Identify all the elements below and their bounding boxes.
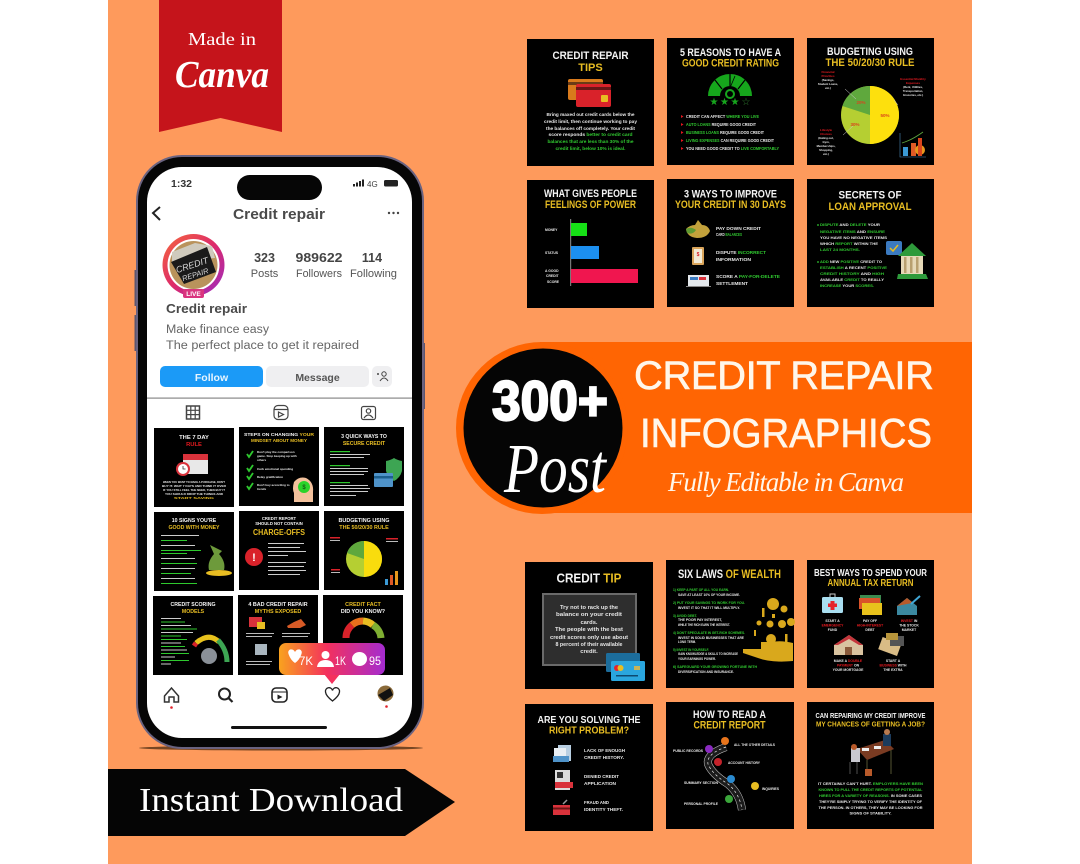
pie chart [841,86,899,144]
post: 7 day rule: THE 7 DAY [179,435,209,441]
card: six laws of wealth: LONG TERM. [678,640,696,644]
profile stats [251,251,397,280]
card: getting a job: HIRES FOR A VARIETY OF REASONS. IN SOME CASES [819,793,922,798]
card: six laws of wealth: INVEST IN SOLID BUSINESSES THAT ARE [678,636,744,640]
post: mindset steps: $ [302,485,306,491]
pie chart: 30% [850,122,860,127]
card: six laws of wealth: 6) SAFEGUARD YOUR GROWING FORTUNE WITH [673,665,758,669]
card: 5 reasons: BUSINESS LOANS REQUIRE GOOD CREDIT [686,130,764,135]
phone mockup [134,155,425,750]
headline: INFOGRAPHICS [640,410,932,456]
headline: CREDIT REPAIR [634,354,934,398]
card: right problem: IDENTITY THEFT. [584,807,623,812]
card: budgeting 50/20/30: etc.) [823,152,829,156]
status bar: 1:32 [171,178,192,190]
icon: investment [897,596,920,615]
post: myths exposed: 4 BAD CREDIT REPAIR [248,602,308,608]
card: budgeting 50/20/30: Shopping, [819,148,833,152]
card: budgeting 50/20/30: THE 50/20/30 RULE [826,57,914,69]
card: 5 reasons: LIVING EXPENSES CAN REQUIRE GOOD CREDIT [686,138,774,143]
card: right problem: FRAUD AND [584,800,610,805]
post: credit fact: DID YOU KNOW? [341,609,385,615]
post: secure credit [324,427,404,506]
300+ post badge: 300+ [492,369,608,432]
profile header [153,207,399,223]
post: mindset steps: others [257,458,266,462]
card: credit repair tips: CREDIT REPAIR [552,50,629,62]
post: mindset steps: Delay gratification [257,475,283,479]
card: loan approval: SECRETS OF [838,190,902,202]
card: budgeting 50/20/30: Essential Monthly [900,77,926,81]
icon: gold coins [743,598,795,662]
card: credit tip: Try not to rack up the [560,605,619,611]
card: read a credit report: HOW TO READ A [693,709,766,721]
card: credit tip: cards. [580,620,598,626]
card: annual tax return: EMERGENCY [822,624,844,628]
card: 3 ways to improve: $ [697,252,700,258]
bar chart: CREDIT [546,274,560,278]
card: loan approval: INCREASE YOUR SCORES. [820,283,874,288]
post: charge-offs: CREDIT REPORT [262,516,297,521]
card: loan approval: ADD NEW POSITIVE CREDIT TO [820,259,882,264]
card: six laws of wealth: WHILE THE RICH EARN THE INTEREST. [678,623,730,627]
post: 7 day rule: START SAVING [174,496,214,500]
card: annual tax return: START A [825,619,840,623]
card: 3 ways to improve: 3 WAYS TO IMPROVE [684,188,777,200]
post: 7 day rule: RULE [186,442,202,448]
profile stats: 114 [362,251,382,265]
card: annual tax return: PAY OFF [863,619,877,623]
card: 5 reasons: ☆ [742,97,751,108]
card: loan approval: LOAN APPROVAL [828,201,912,213]
card: budgeting 50/20/30: Financial [821,70,835,74]
card: annual tax return: INVEST IN [901,619,918,623]
headline [634,354,934,497]
card: budgeting 50/20/30: Groceries, etc.) [903,93,923,97]
post: 7 day rule: IF YOU STILL FEEL THE NEED, THEN BUY IT [163,488,225,492]
card: read a credit report: ALL THE OTHER DETAILS [734,743,775,747]
engagement popup: 7K [299,656,313,668]
bar chart: MONEY [545,228,558,232]
card: budgeting 50/20/30: (Savings, [822,78,834,82]
post: mindset steps: Don't play the comparison [257,450,295,454]
avatar [162,234,224,298]
avatar: REPAIR [181,266,210,283]
engagement popup: 95 [369,656,381,668]
card: loan approval: DISPUTE AND DELETE YOUR [820,222,880,227]
card: annual tax return: PAYMENT ON [837,664,860,668]
post: charge-offs: CHARGE-OFFS [253,528,306,537]
card: budgeting 50/20/30 [807,38,934,165]
card: six laws of wealth: DIVERSIFICATION AND INSURANCE. [678,670,734,674]
card: credit repair tips: credit limit, below 10% is ideal. [556,146,626,151]
card: six laws of wealth: THE POOR PAY INTEREST, [678,618,722,622]
card: feelings of power: FEELINGS OF POWER [545,199,636,211]
card: annual tax return: BEST WAYS TO SPEND YOUR [814,568,928,579]
bar chart: STATUS [545,251,559,255]
profile stats: 323 [254,251,275,265]
card: budgeting 50/20/30: Choices [820,132,832,136]
card: feelings of power [527,180,654,308]
profile stats: 989622 [296,251,343,265]
post: secure credit: 3 QUICK WAYS TO [341,434,387,440]
post: mindset steps: MINDSET ABOUT MONEY [251,438,308,444]
card: six laws of wealth: 3) AVOID DEBT. [673,614,697,618]
card: read a credit report: PERSONAL PROFILE [684,802,718,806]
card: read a credit report: SUMMARY SECTION [684,781,719,785]
card: six laws of wealth [666,560,795,688]
headline: Fully Editable in Canva [667,467,904,497]
icon: business [878,633,904,656]
post: myths exposed [238,595,318,675]
post: good with money: 10 SIGNS YOU'RE [172,518,217,524]
card: right problem: DENIED CREDIT [584,774,619,779]
card: six laws of wealth: SAVE AT LEAST 10% OF YOUR INCOME. [678,593,740,597]
card: read a credit report [666,702,794,829]
ribbon: Made in Canva [159,0,282,132]
avatar: LIVE [186,291,201,298]
card: feelings of power: WHAT GIVES PEOPLE [544,188,637,200]
follow buttons: Message [295,372,340,384]
post: credit fact: CREDIT FACT [345,602,382,608]
phone post grid [153,427,404,675]
panel: orange background [108,0,972,864]
card: right problem: RIGHT PROBLEM? [549,724,629,736]
card: right problem: CREDIT HISTORY. [584,755,624,760]
post: mindset steps [239,427,319,506]
card: budgeting 50/20/30: Gym, [822,140,830,144]
card: right problem [525,704,653,831]
card: annual tax return: MARKET [902,628,917,632]
card: budgeting 50/20/30: etc.) [825,86,831,90]
card: getting a job [807,702,934,829]
card: annual tax return: ANNUAL TAX RETURN [828,578,914,589]
engagement popup [279,643,385,684]
card: 5 reasons: ★ [720,97,729,108]
card: annual tax return: THE EXTRA [883,668,903,672]
banner: credit repair title [456,342,972,514]
follow buttons: Follow [195,372,229,384]
post: 7 day rule: WHEN YOU WANT TO MAKE A PURCHASE, DON'T [163,480,225,484]
card: credit tip: credit scores only use about [550,635,628,641]
card: 5 reasons: GOOD CREDIT RATING [682,58,779,70]
profile header: Credit repair [233,207,325,223]
post: charge-offs [239,511,319,590]
card: credit repair tips [527,39,654,166]
card: 5 reasons: YOU NEED GOOD CREDIT TO LIVE COMFORTABLY [686,146,779,151]
tab icons [186,406,376,420]
profile bio: The perfect place to get it repaired [166,340,359,352]
card: annual tax return: FUND [828,628,838,632]
card: credit tip: CREDIT TIP [556,570,622,586]
card: 3 ways to improve: DISPUTE INCORRECT [716,250,766,256]
card: getting a job: THE PERSON. IN OTHERS, THEY MAY BE LOOKING FOR [818,805,923,810]
icon: credit cards [859,595,882,615]
status bar [171,175,398,200]
profile stats: Followers [296,268,342,280]
bottom card set [525,560,934,831]
card: budgeting 50/20/30: (Eating out, [818,136,834,140]
card: 3 ways to improve: PAY DOWN CREDIT [716,226,761,232]
card: annual tax return: THE STOCK [899,624,919,628]
card: 5 reasons [667,38,794,165]
card: 5 reasons: CREDIT CAN AFFECT WHERE YOU LIVE [686,114,759,119]
post: good with money: GOOD WITH MONEY [168,525,220,531]
avatar: CREDIT [175,255,211,275]
card: six laws of wealth: INVEST IT SO THAT IT WILL MULTIPLY. [678,606,740,610]
icon: house [834,635,863,655]
card: six laws of wealth: SIX LAWS OF WEALTH [678,569,781,581]
bar chart: A GOOD [545,269,559,273]
post: scoring models: MODELS [182,609,205,615]
banner: Instant Download [108,769,455,836]
card: read a credit report: PUBLIC RECORDS [673,749,703,753]
banner: Instant Download: Instant Download [139,782,403,819]
profile stats: Following [350,268,397,280]
engagement popup: 1K [335,656,346,668]
post: mindset steps: Don't buy according to [257,483,290,487]
card: credit tip: credit. [580,649,598,655]
profile bio [166,301,359,352]
card: credit repair tips: score responds better to credit card [548,132,633,137]
card: 3 ways to improve: SETTLEMENT [716,281,748,287]
post: mindset steps: trends [257,487,266,491]
ribbon: Made in Canva: Made in [188,29,256,49]
card: six laws of wealth: YOUR EARNINGS POWER. [678,657,716,661]
card: annual tax return: HIGH-INTEREST [857,624,884,628]
post: secure credit: SECURE CREDIT [343,441,386,447]
bar chart [545,219,638,286]
card: annual tax return [807,560,934,688]
card: six laws of wealth: GAIN KNOWLEDGE & SKILLS TO INCREASE [678,652,738,656]
card: loan approval: NEGATIVE ITEMS AND ENSURE [820,229,885,234]
card: getting a job: KNOWN TO PULL THE CREDIT REPORTS OF POTENTIAL [818,787,923,792]
card: annual tax return: DEBT [865,628,876,632]
card: six laws of wealth: 5) INVEST IN YOURSELF. [673,648,709,652]
card: credit repair tips: balances that are less than 30% of the [548,139,634,144]
phone screen [147,167,412,738]
card: credit repair tips: Bring maxed out credit cards below the [546,112,635,117]
illustration: interview desk [850,729,894,776]
ribbon: Made in Canva: Canva [175,54,269,96]
card: loan approval: CREDIT HISTORY AND HIGH [820,271,884,276]
status bar: 4G [367,180,378,189]
post: budgeting mini: BUDGETING USING [339,518,389,524]
card: annual tax return: BUSINESS WITH [880,664,907,668]
card: credit repair tips: credit limit, then continue working to pay [544,119,637,124]
post: 7 day rule [154,428,234,507]
card: budgeting 50/20/30: Student Loans, [818,82,838,86]
card: budgeting 50/20/30: (Rent, Utilities, [903,85,923,89]
bottom navigation [164,686,394,729]
card: loan approval: ESTABLISH A RECENT POSITIVE [820,265,887,270]
card: loan approval: YOU HAVE NO NEGATIVE ITEMS [820,235,887,240]
card: read a credit report: CREDIT REPORT [694,720,766,732]
post: charge-offs: SHOULD NOT CONTAIN [255,521,303,526]
card: annual tax return: MAKE A DOUBLE [834,659,863,663]
post: mindset steps: game. Stop keeping up with [257,454,297,458]
card: read a credit report: ACCOUNT HISTORY [728,761,761,765]
post: credit fact [323,595,403,675]
pie chart: 20% [856,100,866,105]
card: budgeting 50/20/30: Transportation, [903,89,923,93]
card: 3 ways to improve [667,179,794,307]
card: 3 ways to improve: INFORMATION [716,257,752,263]
post: budgeting mini: THE 50/20/30 RULE [339,525,389,531]
card: six laws of wealth: 4) DON'T SPECULATE IN GET-RICH SCHEMES. [673,631,745,635]
card: read a credit report: INQUIRIES [762,787,779,791]
post: charge-offs: ! [252,552,256,564]
card: annual tax return: YOUR MORTGAGE [833,668,864,672]
card: 5 reasons: ★ [731,97,740,108]
post: mindset steps: STEPS ON CHANGING YOUR [244,432,315,438]
card: 5 reasons: 5 REASONS TO HAVE A [680,47,781,59]
profile bio: Credit repair [166,301,247,316]
card: six laws of wealth: 1) KEEP A PART OF ALL YOU EARN. [673,588,729,592]
road illustration [705,737,759,810]
post: scoring models: CREDIT SCORING [171,602,215,608]
card: right problem: LACK OF ENOUGH [584,748,625,753]
300+ post badge [464,348,622,508]
card: 5 reasons: AUTO LOANS REQUIRE GOOD CREDIT [686,122,756,127]
post: budgeting mini [324,511,404,590]
card: 3 ways to improve: SCORE A PAY-FOR-DELETE [716,274,781,280]
card: budgeting 50/20/30: BUDGETING USING [827,46,913,58]
card: credit tip: 8 percent of their available [556,642,623,648]
post: 7 day rule: YOU SHOULD DROP THE THINGS AND [165,492,223,496]
profile bio: Make finance easy [166,324,269,336]
card: getting a job: SIGNS OF STABILITY. [850,810,892,816]
card: annual tax return: START A [886,659,901,663]
card: 3 ways to improve: YOUR CREDIT IN 30 DAYS [675,199,786,211]
post: 7 day rule: BUY IT. WAIT 7 DAYS AND THINK IT OVER [162,484,226,488]
follow buttons [160,366,392,387]
card: loan approval: WHICH REPORT WITHIN THE [820,241,878,246]
icon: first aid [822,594,843,613]
card: getting a job: IT CERTAINLY CAN'T HURT. EMPLOYERS HAVE BEEN [818,781,923,786]
card: credit tip: balance on your credit [556,612,622,618]
post: scoring models [153,596,233,675]
card: getting a job: THEY'RE SIMPLY TRYING TO VERIFY THE IDENTITY OF [819,799,923,804]
card: 5 reasons: ★ [710,97,719,108]
card: loan approval: LAST 24 MONTHS. [820,247,860,252]
card: credit tip [525,562,653,689]
300+ post badge: Post [503,431,607,508]
post: myths exposed: MYTHS EXPOSED [255,609,301,615]
card: budgeting 50/20/30: Lifestyle [820,128,832,132]
card: right problem: ARE YOU SOLVING THE [538,714,640,726]
card: getting a job: CAN REPAIRING MY CREDIT IMPROVE [816,711,926,720]
card: credit tip: The people with the best [555,627,623,633]
card: right problem: APPLICATION [584,781,616,786]
card: loan approval [807,179,934,307]
top card set [527,38,934,308]
card: credit repair tips: TIPS [578,62,603,74]
card: six laws of wealth: 2) PUT YOUR SAVINGS TO WORK FOR YOU. [673,601,745,605]
bar chart: SCORE [547,280,560,284]
card: 3 ways to improve: CARD BALANCES [716,232,742,238]
post: good with money [154,512,234,591]
pie chart: 50% [880,113,890,118]
card: budgeting 50/20/30: Priorities [821,74,835,78]
card: loan approval: AVAILABLE CREDIT TO REALLY [820,277,884,282]
card: getting a job: MY CHANCES OF GETTING A JOB? [816,720,925,728]
card: budgeting 50/20/30: Memberships, [817,144,836,148]
card: budgeting 50/20/30: Expenses [906,81,920,85]
card: credit repair tips: the balances off completely. Your credit [546,126,635,131]
profile stats: Posts [251,268,279,280]
post: mindset steps: Curb emotional spending [257,467,293,471]
